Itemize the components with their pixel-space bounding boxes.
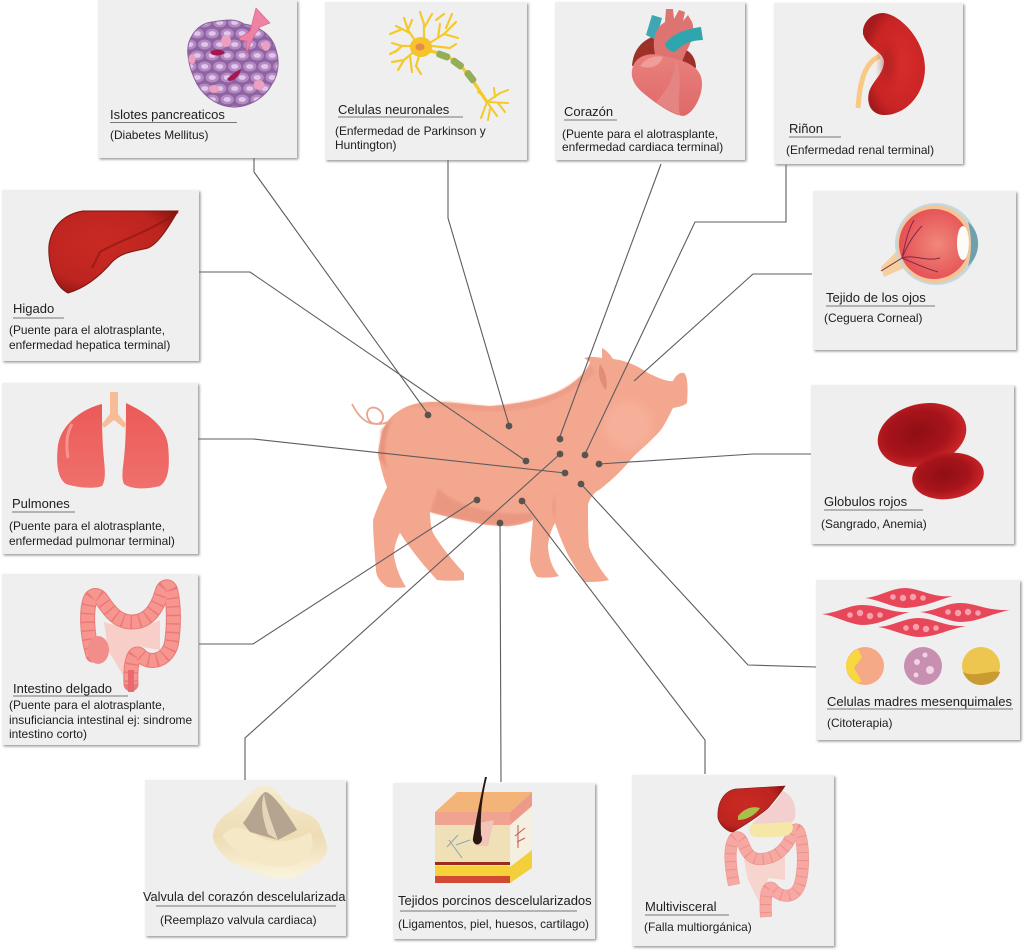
title: Celulas neuronales (338, 102, 450, 117)
icon: red blood cells (871, 394, 987, 504)
title: Islotes pancreaticos (110, 107, 225, 122)
subtitle: (Ligamentos, piel, huesos, cartilago) (398, 917, 589, 931)
subtitle: (Falla multiorgánica) (644, 920, 752, 934)
panel: intestino delgado: intestino corto) (9, 727, 87, 741)
subtitle: (Enfermedad de Parkinson y (335, 124, 486, 138)
subtitle: (Enfermedad renal terminal) (786, 143, 934, 157)
organ site markers (425, 412, 602, 526)
panel: globulos rojos (811, 385, 1014, 544)
subtitle: (Puente para el alotrasplante, (9, 698, 165, 712)
icon: eye (881, 203, 978, 285)
title: Multivisceral (645, 899, 717, 914)
panel: valvula del corazon (143, 780, 346, 936)
panel: higado: enfermedad hepatica terminal) (9, 338, 170, 352)
panel: pulmones: enfermedad pulmonar terminal) (9, 534, 175, 548)
icon: kidney (858, 13, 925, 115)
panel: celulas neuronales (325, 2, 527, 160)
panel: multivisceral (632, 775, 834, 946)
icon: pancreatic islet (188, 8, 278, 107)
panel: pulmones (2, 383, 198, 554)
title: Tejido de los ojos (826, 290, 926, 305)
title: Globulos rojos (824, 494, 908, 509)
icon: multivisceral organs (718, 786, 803, 917)
icon: heart valve (213, 785, 327, 878)
icon: neuron (390, 12, 508, 120)
panel: intestino delgado (2, 574, 198, 745)
subtitle: (Puente para el alotrasplante, (9, 519, 165, 533)
pig body (373, 348, 688, 588)
pig tail (352, 404, 394, 424)
icon: lungs (57, 392, 169, 488)
panel: higado (2, 190, 199, 361)
title: Riñon (789, 121, 823, 136)
panel: rinon (774, 3, 963, 164)
panel: intestino delgado: insuficiancia intestinal ej: sindrome (9, 713, 192, 727)
title: Tejidos porcinos descelularizados (398, 893, 592, 908)
panel: tejido de los ojos (813, 191, 1016, 350)
title: Valvula del corazón descelularizada (143, 889, 346, 904)
subtitle: (Reemplazo valvula cardiaca) (160, 913, 317, 927)
icon: skin block (435, 777, 532, 883)
subtitle: (Citoterapia) (827, 716, 892, 730)
panel: islotes pancreaticos (98, 0, 297, 158)
icon: intestine (87, 587, 173, 692)
pig illustration (352, 348, 688, 588)
panel: tejidos porcinos (393, 777, 595, 939)
title: Corazón (564, 104, 613, 119)
subtitle: (Sangrado, Anemia) (821, 517, 927, 531)
panel: celulas neuronales: Huntington) (335, 138, 397, 152)
icon: mesenchymal cells (822, 588, 1010, 685)
title: Intestino delgado (13, 681, 112, 696)
icon: liver (49, 211, 178, 293)
panel: corazon: enfermedad cardiaca terminal) (562, 140, 723, 154)
panel: corazon (555, 2, 745, 160)
subtitle: (Puente para el alotrasplante, (9, 323, 165, 337)
subtitle: (Diabetes Mellitus) (110, 128, 208, 142)
pig ear (599, 364, 607, 390)
icon: heart (632, 9, 703, 116)
connector lines (198, 158, 816, 782)
subtitle: (Puente para el alotrasplante, (562, 127, 718, 141)
title: Celulas madres mesenquimales (827, 694, 1012, 709)
panel: celulas madres mesenquimales (816, 580, 1020, 740)
title: Higado (13, 301, 54, 316)
subtitle: (Ceguera Corneal) (824, 311, 923, 325)
title: Pulmones (12, 496, 70, 511)
